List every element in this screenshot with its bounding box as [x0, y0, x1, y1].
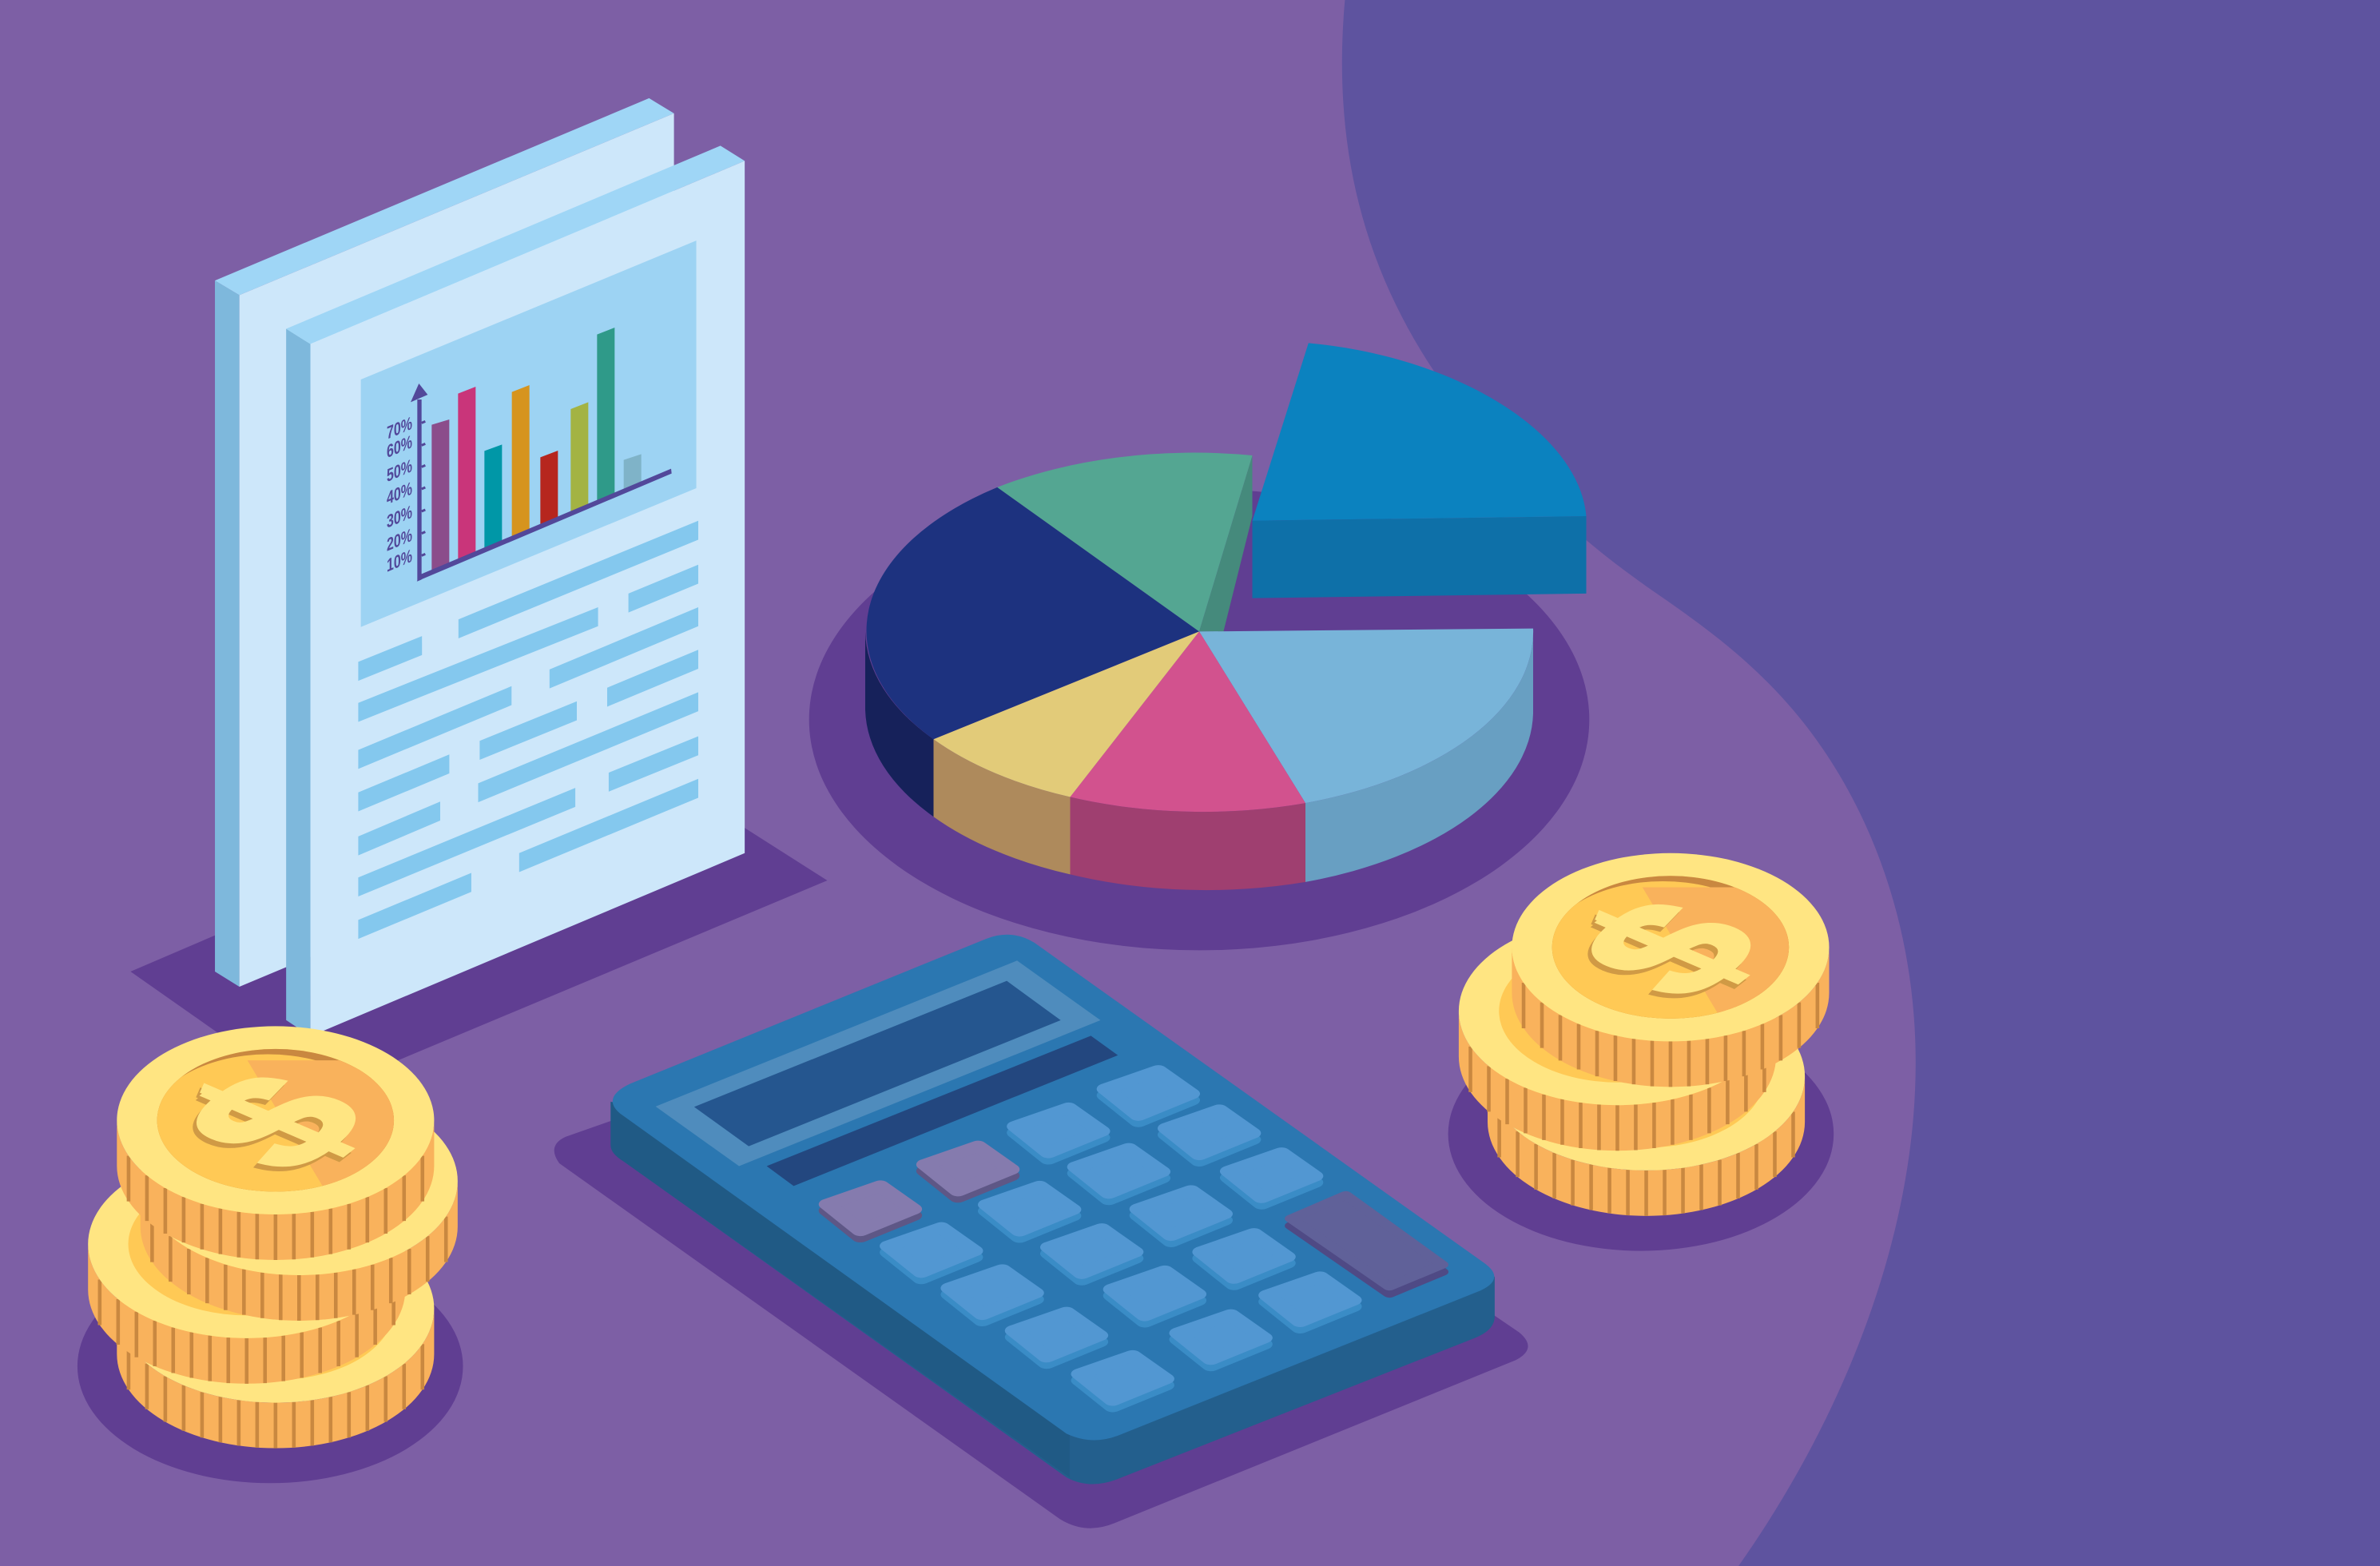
calculator large key [1291, 1195, 1442, 1294]
pie chart shadow [809, 489, 1589, 950]
pie chart detached wedge [1253, 343, 1587, 598]
bar chart: 70% [387, 413, 412, 444]
calculator [610, 935, 1495, 1485]
bar chart: 10% [387, 546, 412, 577]
bar chart: 30% [387, 502, 412, 533]
calculator shadow [554, 1118, 1528, 1528]
calculator screen [656, 960, 1100, 1167]
calculator display strip [767, 1035, 1118, 1186]
bar chart: 40% [387, 479, 412, 509]
chart panel [361, 240, 697, 627]
left coin stack [88, 1026, 458, 1449]
back document [215, 98, 674, 987]
right coin stack [1459, 853, 1830, 1216]
left coin stack shadow [77, 1250, 463, 1483]
calculator keys [828, 1071, 1353, 1407]
bar chart: 50% [387, 456, 412, 487]
bar chart: 20% [387, 525, 412, 556]
document text lines [358, 521, 698, 939]
front document [286, 145, 745, 1036]
bar chart: 60% [387, 432, 412, 463]
documents shadow [130, 828, 827, 1093]
background wave shape [1342, 0, 2380, 1566]
bar chart [387, 328, 672, 582]
pie chart [865, 453, 1533, 890]
right coin stack shadow [1448, 1017, 1834, 1251]
